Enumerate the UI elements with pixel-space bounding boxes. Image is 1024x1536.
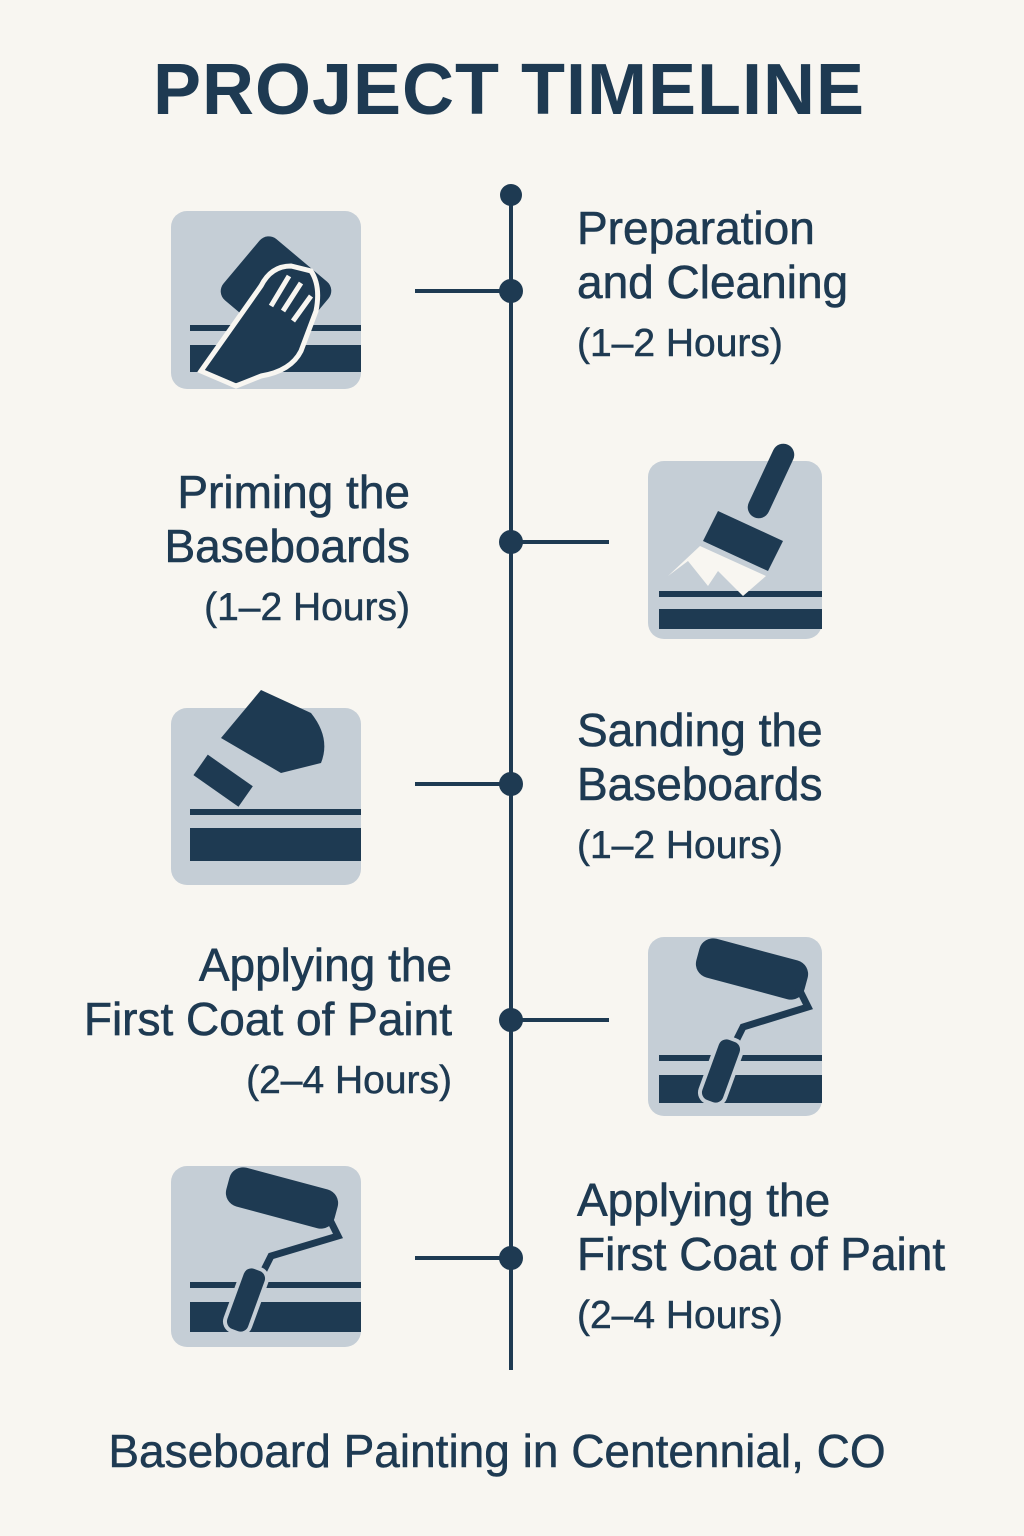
icon: paint brush	[648, 461, 822, 639]
footer caption: Baseboard Painting in Centennial, CO	[108, 1425, 886, 1477]
step 4 text: (2–4 Hours)	[246, 1059, 452, 1102]
step 5 text: (2–4 Hours)	[577, 1294, 783, 1337]
step 5 text	[576, 1174, 946, 1337]
step 1 text: and Cleaning	[577, 256, 848, 308]
icon: hand cleaning	[171, 211, 361, 389]
step 5 text: First Coat of Paint	[577, 1228, 945, 1280]
step 1 text: (1–2 Hours)	[577, 322, 783, 365]
step 1 text: Preparation	[577, 202, 815, 254]
step 4 text: Applying the	[199, 939, 452, 991]
step 5 text: Applying the	[577, 1174, 830, 1226]
step 4 text	[84, 939, 452, 1102]
step 2 text: Priming the	[177, 466, 410, 518]
icon: paint roller	[648, 937, 822, 1116]
icon: sanding block	[171, 708, 361, 885]
icon: paint roller second coat	[171, 1166, 361, 1347]
step 3 text: (1–2 Hours)	[577, 824, 783, 867]
step 3 text: Baseboards	[577, 758, 822, 810]
step 2 text	[164, 466, 410, 629]
step 3 text: Sanding the	[577, 704, 823, 756]
step 1 text	[577, 202, 848, 365]
step 3 text	[577, 704, 823, 867]
step 2 text: (1–2 Hours)	[204, 586, 410, 629]
step 4 text: First Coat of Paint	[84, 993, 452, 1045]
step 2 text: Baseboards	[164, 520, 410, 572]
title: PROJECT TIMELINE	[153, 50, 865, 130]
